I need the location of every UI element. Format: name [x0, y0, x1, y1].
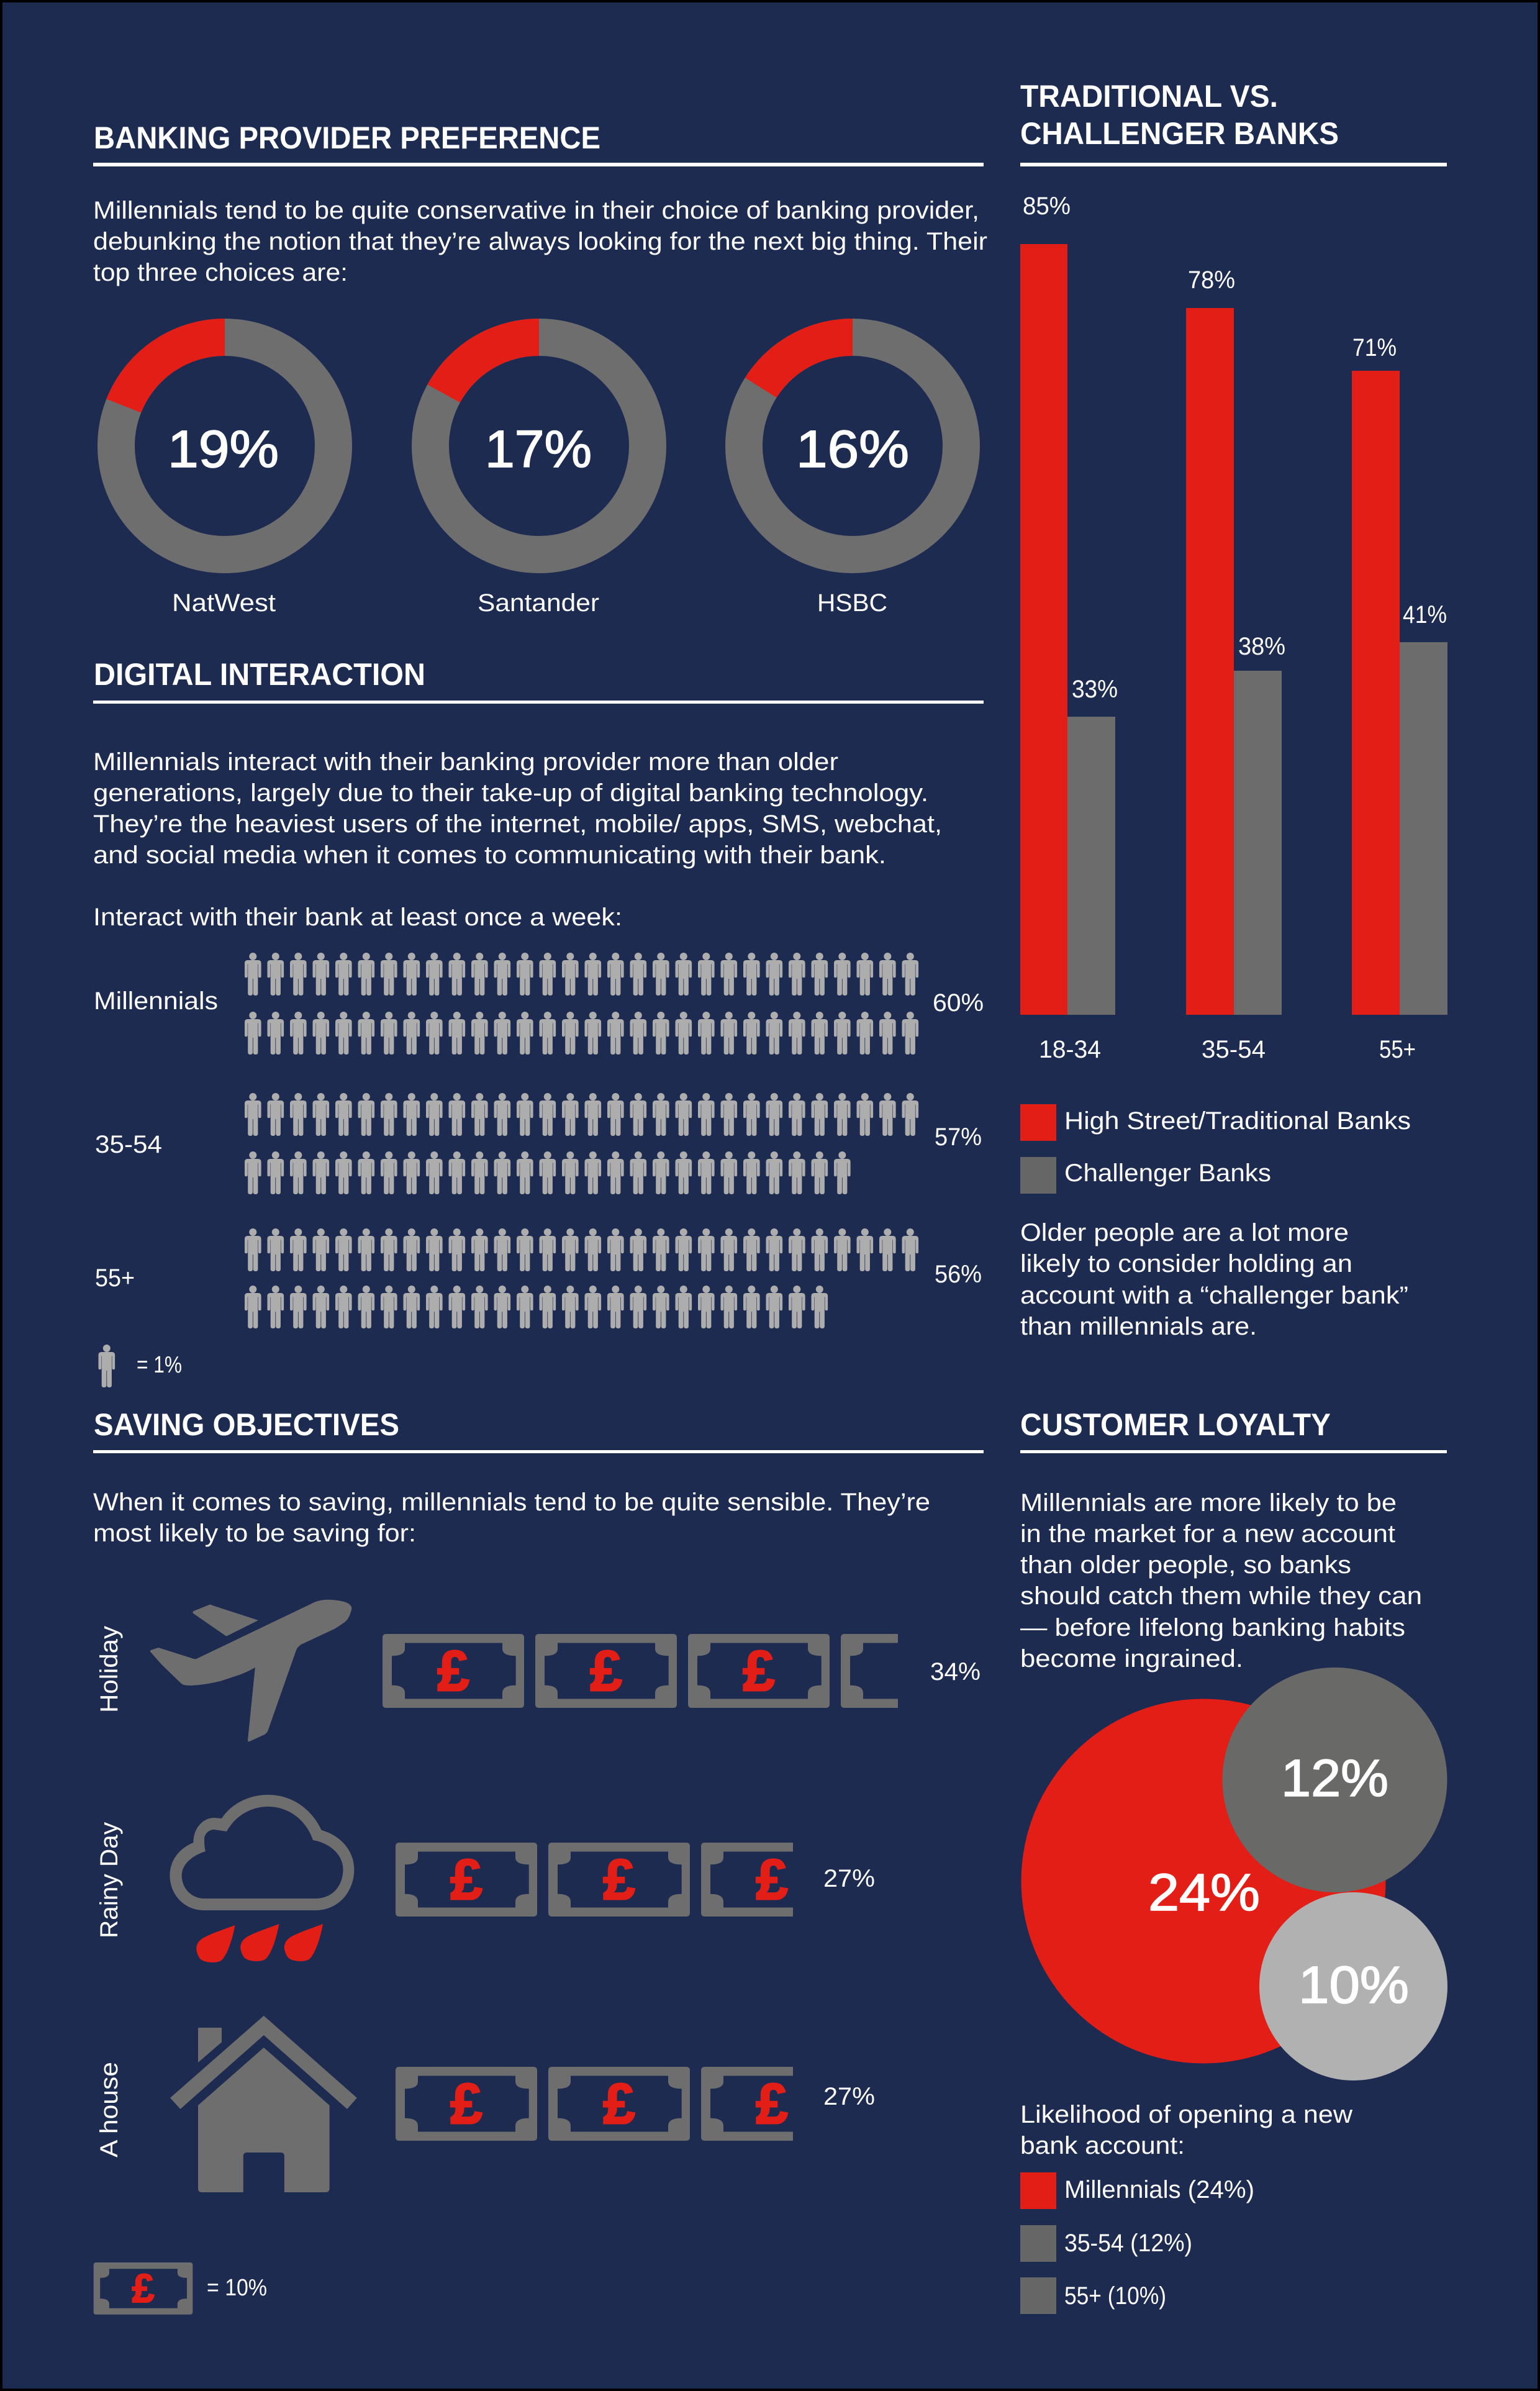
icon: banknotes — [383, 1634, 898, 1708]
legend: bank type: High Street/Traditional Banks — [1064, 1107, 1411, 1135]
panel: customer loyalty — [1020, 1407, 1447, 2314]
text: digital interaction intro: and social media when it comes to communicating with their bank. — [93, 842, 886, 869]
label: holiday: Holiday — [96, 1626, 123, 1713]
text: digital interaction intro — [93, 748, 942, 869]
bubble chart: likelihood of opening an account — [1021, 1667, 1447, 2080]
icon: banknotes: £ — [603, 1848, 635, 1912]
legend: age groups: 35-54 (12%) — [1064, 2230, 1192, 2257]
row: a house 27% — [96, 2016, 875, 2192]
icon: banknotes — [396, 1843, 793, 1917]
value: 27%: 27% — [823, 2083, 875, 2110]
heading: banking provider preference: BANKING PROVIDER PREFERENCE — [94, 120, 600, 155]
icon: banknotes: £ — [603, 2072, 635, 2136]
icon: house — [170, 2016, 357, 2192]
heading: customer loyalty: CUSTOMER LOYALTY — [1020, 1407, 1331, 1442]
bar group: 35-54: 78% — [1188, 266, 1235, 294]
text: older people note: than millennials are. — [1020, 1313, 1257, 1340]
text: customer loyalty intro — [1020, 1489, 1422, 1672]
text: likelihood lead-in: bank account: — [1020, 2132, 1185, 2159]
intro text: Millennials tend to be quite conservative in their choice of banking provider, — [93, 197, 979, 224]
icon: rain cloud — [170, 1795, 354, 1962]
text: saving intro — [93, 1489, 930, 1547]
intro text: top three choices are: — [93, 259, 348, 286]
pictogram row: 35-54 57%: 57% — [935, 1123, 982, 1151]
text: likelihood lead-in: Likelihood of opening a new — [1020, 2101, 1352, 2128]
bar group: 35-54: 38% — [1238, 633, 1285, 660]
panel: saving objectives — [93, 1407, 984, 2315]
icon: banknotes: £ — [437, 1640, 469, 1703]
text: customer loyalty intro: should catch them while they can — [1020, 1582, 1422, 1610]
legend: one banknote equals 10%: £ — [132, 2266, 154, 2311]
legend: bank type — [1020, 1104, 1411, 1194]
text: saving intro: When it comes to saving, millennials tend to be quite sensible. They’re — [93, 1489, 930, 1516]
label: rainy day: Rainy Day — [96, 1822, 123, 1938]
legend: age groups: Millennials (24%) — [1064, 2176, 1254, 2203]
bar group: 18-34: 33% — [1072, 676, 1118, 703]
pictogram row: 55+ 56%: 55+ — [95, 1264, 135, 1292]
value: 27%: 27% — [823, 1865, 875, 1892]
text: customer loyalty intro: than older people, so banks — [1020, 1551, 1351, 1579]
heading: traditional vs challenger banks — [1020, 79, 1339, 151]
text: older people note: Older people are a lot more — [1020, 1219, 1349, 1246]
bar group: 55+: 71% — [1352, 334, 1397, 361]
donut chart: Santander 17%: 17% — [485, 420, 592, 478]
panel: digital interaction — [93, 657, 984, 1387]
pictogram row: Millennials 60% — [94, 953, 984, 1055]
heading: digital interaction: DIGITAL INTERACTION — [94, 657, 425, 692]
pictogram row: 55+ 56%: 56% — [935, 1261, 982, 1288]
pictogram row: Millennials 60%: 60% — [933, 989, 984, 1017]
pictogram row: 55+ 56% — [95, 1228, 982, 1328]
bubble chart: likelihood of opening an account: 24% — [1148, 1863, 1260, 1921]
text: older people note: account with a “challenger bank” — [1020, 1282, 1408, 1309]
donut chart: Santander 17% — [430, 337, 648, 617]
bar group: 18-34: 18-34 — [1039, 1036, 1101, 1063]
text: older people note: likely to consider holding an — [1020, 1250, 1352, 1277]
row: rainy day 27% — [96, 1795, 875, 1962]
text: digital interaction intro: generations, largely due to their take-up of digital banking technology. — [93, 779, 928, 807]
donut chart: HSBC 16%: HSBC — [817, 589, 887, 617]
text: weekly interaction lead-in: Interact with their bank at least once a week: — [93, 904, 622, 931]
bar group: 18-34 — [1020, 193, 1118, 1063]
bubble chart: likelihood of opening an account: 12% — [1281, 1749, 1388, 1807]
icon: banknotes: £ — [756, 2072, 788, 2136]
icon: banknotes: £ — [590, 1640, 622, 1703]
value: 34%: 34% — [930, 1658, 981, 1685]
panel: banking provider preference — [93, 120, 987, 617]
bar group: 35-54: 35-54 — [1202, 1036, 1266, 1063]
legend: one person equals 1%: = 1% — [137, 1352, 182, 1378]
pictogram row: Millennials 60%: Millennials — [94, 987, 218, 1015]
text: digital interaction intro: They’re the heaviest users of the internet, mobile/ apps, SMS, webchat, — [93, 810, 942, 838]
text: customer loyalty intro: Millennials are more likely to be — [1020, 1489, 1397, 1517]
icon: banknotes: £ — [450, 1848, 482, 1912]
bar group: 55+ — [1352, 334, 1447, 1063]
legend: age groups — [1020, 2172, 1254, 2314]
donut chart: Santander 17%: Santander — [478, 589, 599, 617]
icon: banknotes — [396, 2067, 793, 2141]
legend: one banknote equals 10%: = 10% — [207, 2275, 267, 2301]
legend: one banknote equals 10% — [94, 2262, 267, 2315]
label: a house: A house — [96, 2062, 123, 2157]
donut chart: HSBC 16% — [744, 337, 961, 617]
intro text — [93, 197, 987, 286]
donut chart: NatWest 19%: NatWest — [172, 589, 276, 617]
row: holiday 34% — [96, 1600, 982, 1741]
text: customer loyalty intro: — before lifelong banking habits — [1020, 1614, 1405, 1641]
donut chart: HSBC 16%: 16% — [796, 420, 909, 478]
pictogram row: 35-54 57%: 35-54 — [95, 1131, 162, 1158]
bubble chart: likelihood of opening an account: 10% — [1298, 1956, 1409, 2014]
bar group: 55+: 55+ — [1379, 1036, 1416, 1063]
intro text: debunking the notion that they’re always looking for the next big thing. Their — [93, 228, 987, 255]
icon: banknotes: £ — [756, 1848, 788, 1912]
heading: traditional vs challenger banks: TRADITIONAL VS. — [1020, 79, 1278, 114]
bar group: 55+: 41% — [1403, 601, 1447, 628]
legend: one person equals 1% — [98, 1345, 182, 1387]
text: digital interaction intro: Millennials interact with their banking provider more than older — [93, 748, 838, 776]
icon: banknotes: £ — [450, 2072, 482, 2136]
donut chart: NatWest 19%: 19% — [168, 420, 279, 478]
donut chart: NatWest 19% — [116, 337, 333, 617]
icon: banknotes: £ — [743, 1640, 775, 1703]
heading: traditional vs challenger banks: CHALLENGER BANKS — [1020, 116, 1339, 151]
legend: age groups: 55+ (10%) — [1064, 2282, 1166, 2310]
bar group: 35-54 — [1186, 266, 1285, 1063]
panel: traditional vs challenger banks — [1020, 79, 1447, 1340]
text: saving intro: most likely to be saving for: — [93, 1520, 416, 1547]
heading: saving objectives: SAVING OBJECTIVES — [94, 1407, 399, 1442]
text: customer loyalty intro: in the market for a new account — [1020, 1520, 1395, 1548]
pictogram row: 35-54 57% — [95, 1093, 982, 1194]
legend: bank type: Challenger Banks — [1064, 1159, 1271, 1187]
text: likelihood lead-in — [1020, 2101, 1352, 2159]
icon: airplane — [150, 1600, 351, 1741]
text: older people note — [1020, 1219, 1408, 1340]
text: customer loyalty intro: become ingrained. — [1020, 1645, 1243, 1672]
bar group: 18-34: 85% — [1023, 193, 1071, 220]
